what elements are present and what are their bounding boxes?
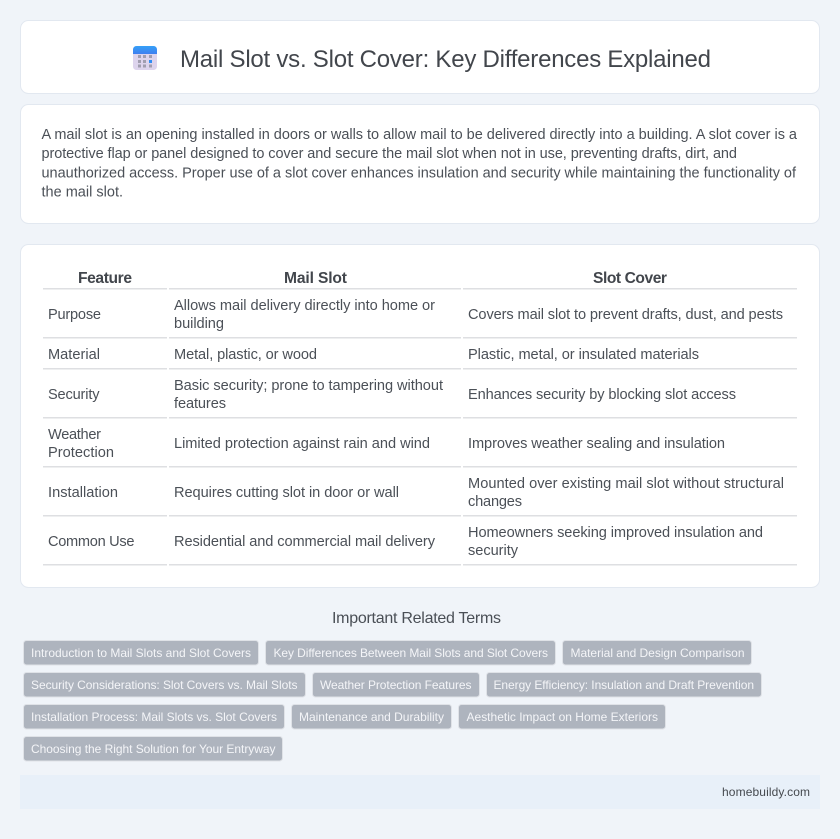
table row: Weather Protection <box>43 427 797 468</box>
table row: Installation <box>43 476 797 516</box>
tag: introduction <box>24 640 258 665</box>
title: Mail Slot vs. Slot Cover: Key Differences Explained <box>180 46 711 73</box>
tag: energy efficiency <box>486 672 762 697</box>
panel: introduction <box>20 104 820 224</box>
table row: Installation: changes <box>468 494 522 510</box>
tag: energy efficiency: Energy Efficiency: Insulation and Draft Prevention <box>494 678 754 692</box>
text block: introduction paragraph <box>42 127 798 200</box>
tag: weather protection <box>312 672 480 697</box>
table row: Purpose: Covers mail slot to prevent drafts, dust, and pests <box>468 307 783 323</box>
table row: Purpose <box>43 298 797 338</box>
tag: security: Security Considerations: Slot Covers vs. Mail Slots <box>31 678 298 692</box>
table row: Security <box>43 378 797 418</box>
footer site name: homebuildy.com <box>722 785 810 799</box>
table row: Weather Protection: Limited protection against rain and wind <box>174 436 430 452</box>
tag: installation: Installation Process: Mail Slots vs. Slot Covers <box>31 710 277 724</box>
table row: Material: Metal, plastic, or wood <box>174 347 317 363</box>
table row: Purpose: Allows mail delivery directly into home or <box>174 298 435 314</box>
table header row: Feature <box>78 270 132 287</box>
table row: Installation: Mounted over existing mail slot without structural <box>468 476 784 492</box>
icon: calendar grid <box>133 46 157 70</box>
table row: Weather Protection: Improves weather sealing and insulation <box>468 436 725 452</box>
table row: Weather Protection: Protection <box>48 445 114 461</box>
tag: introduction: Introduction to Mail Slots and Slot Covers <box>31 646 251 660</box>
tag: security <box>24 672 306 697</box>
tag: choosing the right solution: Choosing the Right Solution for Your Entryway <box>31 742 276 756</box>
table row: Material: Plastic, metal, or insulated materials <box>468 347 699 363</box>
tag: material and design: Material and Design Comparison <box>570 646 744 660</box>
table row: Security: features <box>174 396 226 412</box>
tag: aesthetic impact <box>458 704 666 729</box>
tag: material and design <box>562 640 752 665</box>
heading: related terms: Important Related Terms <box>332 610 501 627</box>
table row: Material: Material <box>48 347 100 363</box>
table row: Security: Security <box>48 387 100 403</box>
table row: Common Use: Common Use <box>48 534 134 550</box>
tag: installation <box>24 704 284 729</box>
table row: Material <box>43 347 797 370</box>
panel: comparison table <box>20 244 820 588</box>
tag: key differences: Key Differences Between Mail Slots and Slot Covers <box>274 646 548 660</box>
table row: Installation: Requires cutting slot in door or wall <box>174 485 399 501</box>
table row: Purpose: building <box>174 316 224 332</box>
table header row <box>43 270 797 290</box>
table row: Common Use: Residential and commercial mail delivery <box>174 534 436 550</box>
table row: Security: Basic security; prone to tampering without <box>174 378 443 394</box>
table row: Weather Protection: Weather <box>48 427 101 443</box>
table header row: Mail Slot <box>284 270 347 287</box>
footer <box>20 775 820 809</box>
text block: introduction paragraph: A mail slot is an opening installed in doors or walls to allow mail to be delivered directly into a building. A slot cover is a <box>42 127 798 143</box>
tag: maintenance: Maintenance and Durability <box>299 710 444 724</box>
table row: Common Use <box>43 525 797 566</box>
table row: Purpose: Purpose <box>48 307 101 323</box>
tag: key differences <box>266 640 556 665</box>
tag: choosing the right solution <box>24 736 282 761</box>
text block: introduction paragraph: the mail slot. <box>42 184 123 200</box>
table header row: Slot Cover <box>593 270 667 287</box>
tag: maintenance <box>292 704 452 729</box>
tag: weather protection: Weather Protection Features <box>320 678 472 692</box>
table row: Common Use: Homeowners seeking improved insulation and <box>468 525 763 541</box>
tag: aesthetic impact: Aesthetic Impact on Home Exteriors <box>466 710 658 724</box>
text block: introduction paragraph: protective flap or panel designed to cover and secure the mail slot when not in use, preventing drafts, dirt, and <box>42 146 737 162</box>
table row: Installation: Installation <box>48 485 118 501</box>
table row: Security: Enhances security by blocking slot access <box>468 387 736 403</box>
related term tags <box>24 640 762 761</box>
text block: introduction paragraph: unauthorized access. Proper use of a slot cover enhances insulation and security while maintaining the functionality of <box>42 166 797 182</box>
panel: header <box>20 20 820 94</box>
table row: Common Use: security <box>468 543 519 559</box>
